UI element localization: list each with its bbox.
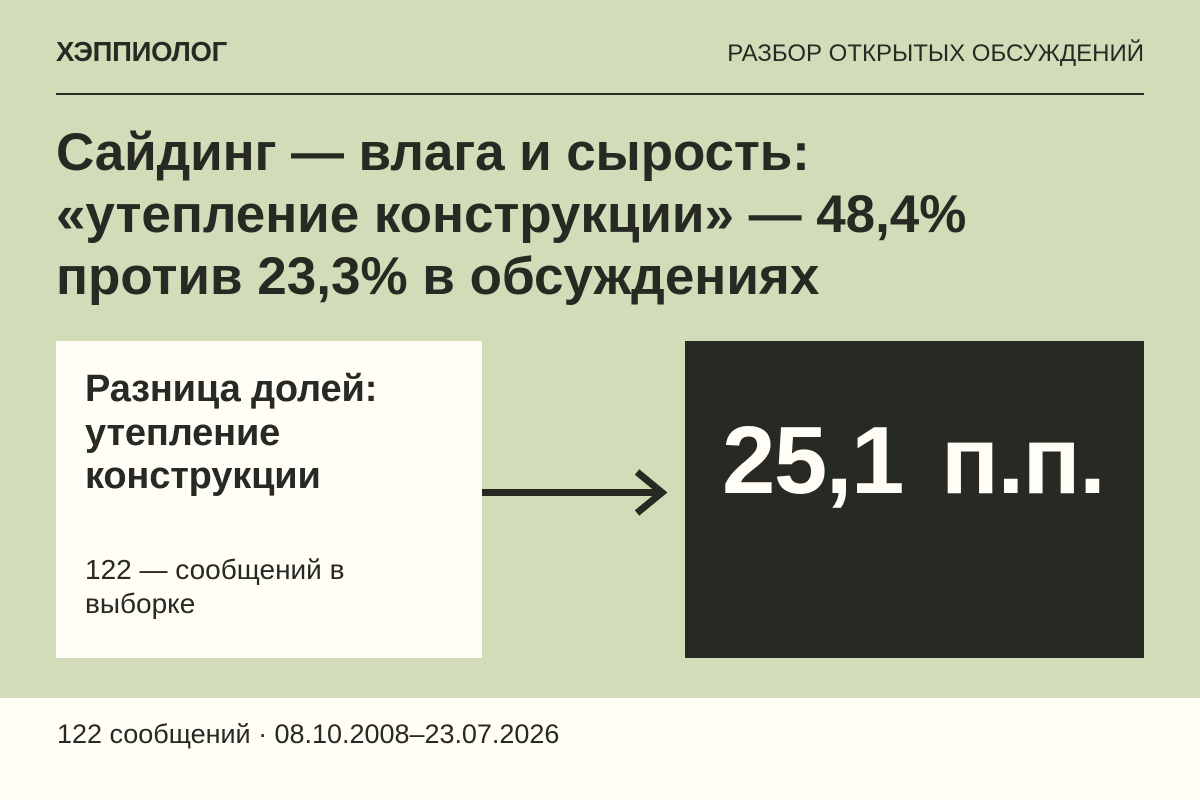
metric value: 25,1 п.п. [722,407,1104,514]
arrow [482,469,668,516]
footer text: 122 сообщений · 08.10.2008–23.07.2026 [57,719,559,749]
panel heading: Разница долей: [85,368,377,410]
title: Сайдинг — влага и сырость: [56,123,810,182]
panel heading [85,368,377,497]
title: «утепление конструкции» — 48,4% [56,185,966,244]
panel: metric value [685,341,1144,658]
title [56,123,966,306]
sample note: выборке [85,588,195,619]
panel: metric description [56,341,482,658]
title: против 23,3% в обсуждениях [56,247,819,306]
panel heading: утепление [85,412,280,454]
sample note [85,554,344,619]
panel heading: конструкции [85,455,321,497]
footer band [0,698,1200,800]
header rule [56,93,1144,95]
sample note: 122 — сообщений в [85,554,344,585]
brand name: ХЭППИОЛОГ [56,36,227,67]
header caption: РАЗБОР ОТКРЫТЫХ ОБСУЖДЕНИЙ [727,40,1144,67]
